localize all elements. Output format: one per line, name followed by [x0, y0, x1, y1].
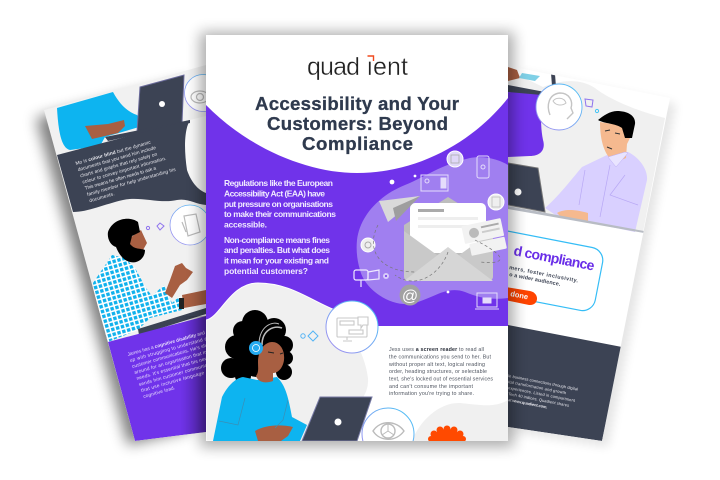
- section: purple text band: [108, 316, 206, 441]
- text: about Quadient: at www.quadient.com.: [508, 397, 548, 410]
- text: intro paragraphs: potential customers?: [224, 266, 308, 276]
- text: intro paragraphs: [224, 178, 336, 276]
- callout: beyond compliance: [508, 230, 604, 312]
- text: callout copy: o a wider audience.: [509, 272, 561, 288]
- shape: orange scalloped badge: [428, 426, 466, 465]
- text: colour blind paragraph: This means he often needs to ask a: [84, 165, 157, 192]
- icon: at sign circle: @: [402, 288, 418, 305]
- icon: sparkle: [585, 99, 599, 113]
- icon: eye circle: [362, 408, 414, 460]
- text: cognitive disability paragraph: needs. It's essential that his new gas: [136, 353, 219, 382]
- text: about Quadient: [508, 373, 579, 410]
- text: colour blind paragraph: family member for help understanding his: [86, 167, 177, 198]
- text: cognitive disability paragraph: cognitive load.: [143, 385, 176, 400]
- text: colour blind paragraph: charts and graphs that rely solely on: [79, 151, 158, 179]
- illustration: laptop: [302, 397, 372, 441]
- title: [255, 93, 459, 154]
- text: screen reader paragraph: Jess uses a screen reader to read all: [389, 347, 484, 353]
- text: screen reader paragraph: [389, 347, 493, 397]
- icon: envelope: [404, 197, 493, 281]
- icon: sparkle: [146, 223, 164, 230]
- icon: mailbox: [354, 270, 379, 287]
- section: dark footer: [508, 325, 622, 441]
- logo: quadient: i: [367, 53, 373, 81]
- title: Accessibility and Your: [255, 93, 459, 114]
- text: intro paragraphs: put pressure on organisations: [224, 199, 333, 209]
- shape: purple background: [206, 98, 508, 326]
- logo: quadient: ent: [373, 53, 408, 81]
- icon: laptop: [475, 293, 499, 309]
- logo: quadient: quad: [307, 53, 360, 81]
- text: screen reader paragraph: and can't consume the important: [389, 384, 474, 390]
- text: cognitive disability paragraph: James has a cognitive disability and grew: [127, 327, 217, 358]
- panel: left brochure page: [36, 60, 230, 450]
- shape: light purple blob: [357, 157, 508, 304]
- text: cognitive disability paragraph: around for an organisation that meets: [134, 347, 218, 376]
- text: callout copy: mers, foster inclusivity.: [509, 265, 579, 284]
- icon: hand circle: [170, 205, 210, 245]
- text: intro paragraphs: Regulations like the European: [224, 178, 333, 188]
- icon: sparkle: [301, 331, 318, 341]
- text: screen reader paragraph: information you're trying to share.: [389, 391, 474, 397]
- text: intro paragraphs: Non-compliance means fines: [224, 235, 330, 245]
- icon: at sign circle: [400, 284, 420, 306]
- icon: phone: [477, 156, 489, 178]
- shape: grey blob right: [412, 400, 508, 441]
- icon: screen circle: [326, 301, 378, 353]
- section: dark text band: [57, 120, 206, 212]
- icon: small target dot: [383, 273, 389, 279]
- text: colour blind paragraph: documents that you send him include: [77, 145, 157, 173]
- background blob: [508, 70, 665, 232]
- icon: eye circle: [184, 74, 206, 112]
- illustration: man with checked shirt: [93, 219, 206, 342]
- shape: white blob beside dark band: [185, 119, 194, 184]
- icon: folder circle: [488, 194, 504, 210]
- text: about Quadient: Tech 40 indices. Quadient shares: [508, 391, 570, 408]
- icon: search circle: [361, 238, 375, 252]
- dashed trails: [373, 225, 500, 281]
- section: lower white area: [206, 326, 508, 441]
- text: screen reader paragraph: the communications you send to her. But: [389, 354, 492, 360]
- logo: quadient: [308, 55, 408, 80]
- icon: paper plane: [379, 196, 420, 222]
- heading: compliance: d compliance: [512, 242, 596, 274]
- text: colour blind paragraph: colour to convey important information.: [82, 156, 167, 186]
- icon: head circle: [536, 84, 582, 130]
- illustration: envelope hero: [354, 151, 508, 309]
- illustration: person in blue at laptop: [57, 75, 190, 150]
- title: Compliance: [302, 133, 413, 154]
- text: colour blind paragraph: Mo is colour blind but the dynamic: [75, 139, 152, 167]
- illustration: laptop: [508, 163, 545, 212]
- text: intro paragraphs: and penalties. But what does: [224, 245, 330, 255]
- text: cognitive disability paragraph: that use inclusive language and: [140, 367, 215, 394]
- shadow: center page: [200, 32, 514, 447]
- icon: profile cards: [461, 218, 507, 257]
- text: screen reader paragraph: order, heading structures, or selectable: [389, 369, 487, 375]
- section divider: [508, 206, 644, 233]
- illustration: man in lavender shirt: [545, 111, 647, 232]
- text: about Quadient: experiences. Listed in compartment: [508, 385, 576, 403]
- sparkles: [390, 175, 449, 293]
- text: intro paragraphs: it mean for your existing and: [224, 256, 329, 266]
- button: done: done: [510, 289, 529, 301]
- text: cognitive disability paragraph: up with struggling to understand and: [129, 334, 214, 364]
- panel: center brochure page: [206, 35, 508, 465]
- shape: grey blob left: [206, 283, 369, 441]
- illustration: hand and tablet fragment: [508, 67, 556, 98]
- text: screen reader paragraph: without proper alt text, logical reading: [389, 362, 485, 368]
- icon: ID card: [421, 175, 448, 191]
- text: colour blind paragraph: documents.: [89, 191, 115, 204]
- shape: purple blob: [508, 92, 544, 157]
- text: cognitive disability paragraph: sends him customer communications: [138, 359, 222, 388]
- text: about Quadient: ital transformation and growth: [508, 379, 567, 395]
- text: colour blind paragraph: [76, 141, 176, 202]
- text: intro paragraphs: accessible.: [224, 220, 267, 230]
- panel: right brochure page: [508, 67, 676, 448]
- text: about Quadient: le business connections through digital: [508, 373, 579, 392]
- text: cognitive disability paragraph: [128, 330, 206, 398]
- icon: document circle: [447, 151, 463, 167]
- text: intro paragraphs: to make their communications: [224, 209, 336, 219]
- text: screen reader paragraph: text, she's locked out of essential services: [389, 376, 493, 382]
- title: Customers: Beyond: [267, 113, 448, 134]
- illustration: woman with headset at laptop: [213, 310, 307, 441]
- text: cognitive disability paragraph: customer communications. He's shown: [131, 340, 216, 370]
- text: intro paragraphs: Accessibility Act (EAA) have: [224, 188, 325, 198]
